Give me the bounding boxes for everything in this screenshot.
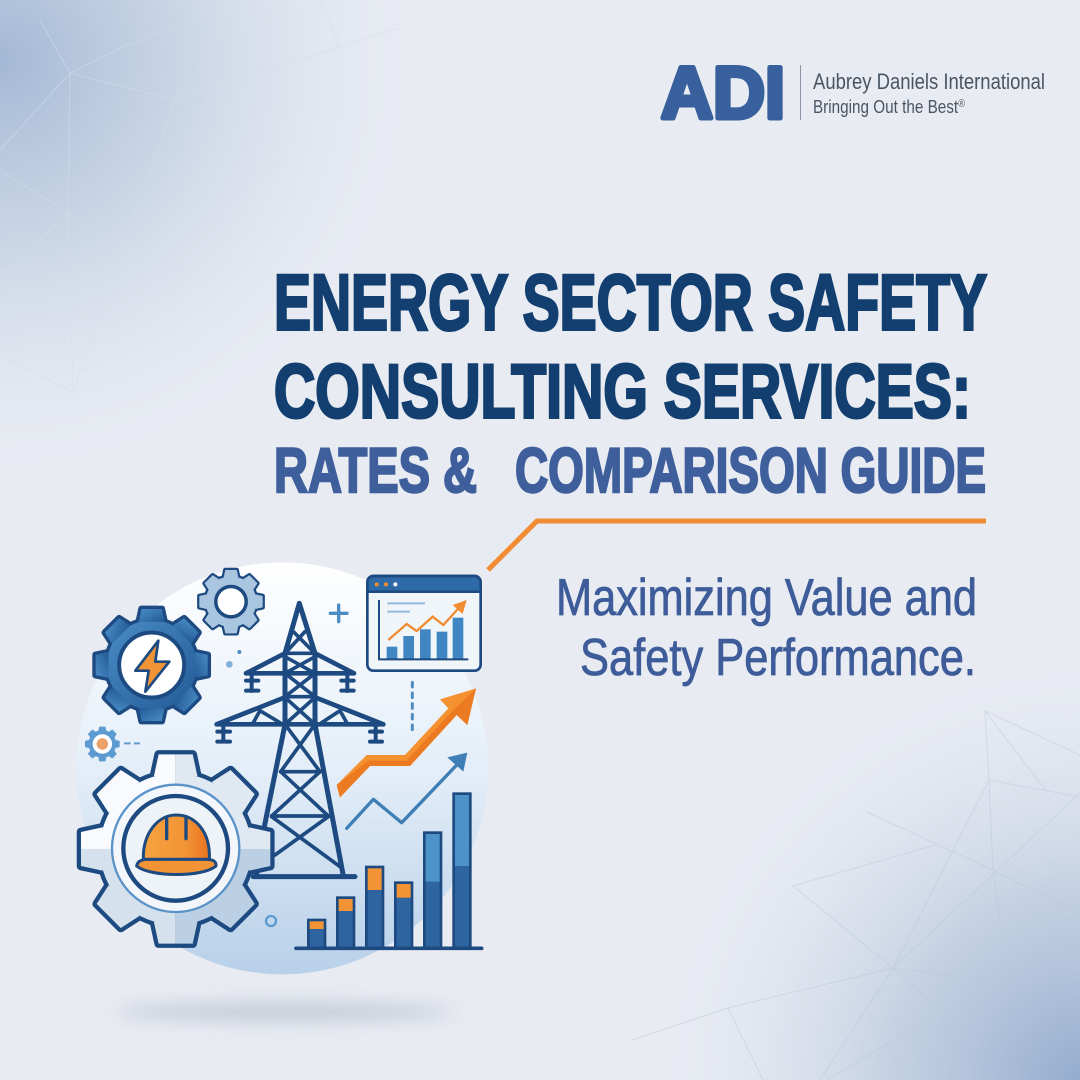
logo: Aubrey Daniels International: Bringing Out the Best xyxy=(813,97,984,117)
illustration: energy and safety xyxy=(72,562,488,974)
logo: Aubrey Daniels International: ADI xyxy=(661,53,785,134)
orange connector line xyxy=(488,521,986,570)
title: RATES & xyxy=(274,436,477,506)
subtitle: Safety Performance. xyxy=(580,629,976,687)
icon: large gear with hard hat xyxy=(72,745,280,953)
subtitle xyxy=(556,569,977,687)
illustration shadow xyxy=(115,1004,455,1020)
arrow: orange rising xyxy=(337,688,476,797)
icon: tiny gear with dashes xyxy=(85,727,140,761)
title xyxy=(274,258,987,506)
subtitle: Maximizing Value and xyxy=(556,569,977,627)
dashed connector xyxy=(408,682,417,730)
logo: Aubrey Daniels International xyxy=(661,53,1045,134)
icon: blue gear with lightning bolt xyxy=(96,609,208,721)
logo: Aubrey Daniels International: ® xyxy=(958,98,965,110)
icon: small grey-blue gear xyxy=(199,570,263,633)
arrow: blue rising trend xyxy=(347,753,467,828)
decorative plus and dots xyxy=(226,605,347,926)
background disc xyxy=(76,562,488,974)
icon: transmission tower xyxy=(217,603,383,877)
bar chart xyxy=(296,794,482,948)
icon: dashboard chart window xyxy=(367,576,481,671)
